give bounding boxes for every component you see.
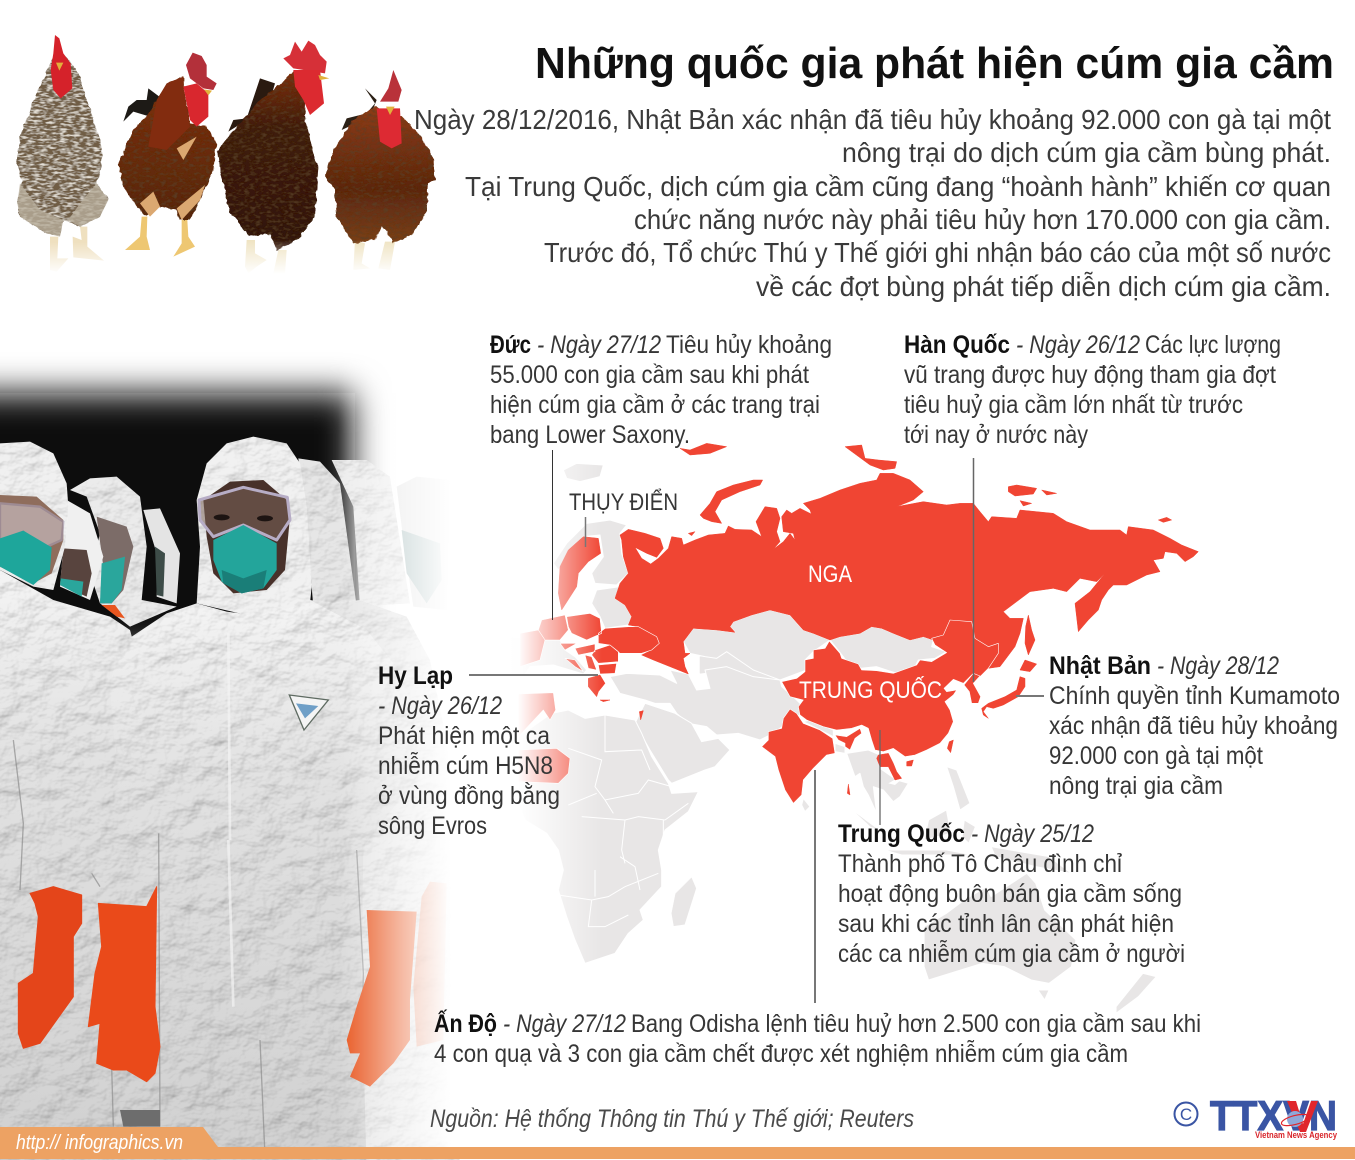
footer bar with url tab: http:// infographics.vn [16, 1132, 183, 1154]
logo: TTXVN: TTXVN [1210, 1092, 1337, 1139]
front left worker head [0, 442, 68, 590]
back figures [60, 458, 450, 627]
text block: Nhật Bản: Nhật Bản [1049, 652, 1151, 680]
text block: Hy Lạp: Hy Lạp [378, 662, 453, 690]
text block: Hàn Quốc: Hàn Quốc [904, 331, 1010, 359]
grey land: Europe, Asia [510, 463, 970, 813]
text block: Trung Quốc: các ca nhiễm cúm gia cầm ở người [838, 939, 1185, 968]
text block: Hàn Quốc: Các lực lượng [1145, 331, 1281, 359]
chicken 3: dark brown [218, 41, 329, 273]
text block: Trung Quốc: Trung Quốc [838, 820, 965, 848]
text block: Hàn Quốc: - Ngày 26/12 [1016, 331, 1140, 359]
chicken 2: red brown [118, 53, 217, 257]
text block: Nhật Bản [1049, 652, 1340, 800]
text block: Hy Lạp: ở vùng đồng bằng [378, 781, 560, 810]
suit bodies [0, 570, 460, 1160]
China [782, 620, 998, 757]
map label: Nga: NGA [808, 561, 852, 588]
text block: Trung Quốc: hoạt động buôn bán gia cầm sống [838, 880, 1182, 908]
world map [500, 440, 1198, 1013]
text block: Hàn Quốc [904, 331, 1281, 449]
text block: Đức: Đức [490, 331, 531, 359]
text block: Hy Lạp: nhiễm cúm H5N8 [378, 751, 553, 780]
text block: Ấn Độ: Ấn Độ [434, 1009, 497, 1038]
red: West Africa fade zone [518, 693, 570, 783]
Russia [615, 443, 1198, 785]
suit seams [13, 633, 363, 1157]
dark gap at bottom [120, 1110, 160, 1127]
illustration: four chickens [0, 35, 440, 274]
text block: Hy Lạp: sông Evros [378, 812, 487, 840]
intro text block [414, 104, 1331, 302]
text block: Nhật Bản: 92.000 con gà tại một [1049, 742, 1263, 770]
text block: Đức: bang Lower Saxony. [490, 421, 690, 449]
text block: Đức: Tiêu hủy khoảng [666, 331, 832, 359]
text block: Hy Lạp [378, 662, 560, 840]
map label: Trung Quốc: TRUNG QUỐC [799, 676, 942, 704]
icon: copyright mark: C [1180, 1105, 1192, 1124]
text block: Hàn Quốc: vũ trang được huy động tham gia đợt [904, 361, 1276, 389]
grey land: Africa, Oceania [518, 710, 698, 963]
map label: Thụy Điển: THỤY ĐIỂN [569, 488, 678, 516]
leader lines [469, 450, 1044, 1003]
text block: Hy Lạp: Phát hiện một ca [378, 722, 550, 750]
icon: copyright mark [1174, 1102, 1198, 1126]
text block: Đức: 55.000 con gia cầm sau khi phát [490, 361, 809, 389]
chicken 1: speckled [17, 35, 108, 272]
icon: globe [1280, 1101, 1318, 1132]
intro text block: nông trại do dịch cúm gia cầm bùng phát. [842, 137, 1331, 168]
orange gloves [18, 882, 447, 1087]
text block: Trung Quốc: sau khi các tỉnh lân cận phát hiện [838, 910, 1174, 938]
text block: Nhật Bản: nông trại gia cầm [1049, 772, 1223, 800]
logo: TTXVN: Vietnam News Agency [1255, 1130, 1337, 1140]
text block: Ấn Độ [434, 1009, 1201, 1068]
Southeast Asia red [847, 740, 953, 795]
text block: Hàn Quốc: tới nay ở nước này [904, 421, 1088, 449]
red countries [520, 443, 1198, 803]
Korea [964, 673, 981, 703]
photo: workers in protective suits [0, 340, 470, 1160]
text block: Đức [490, 331, 832, 449]
main worker hood [197, 437, 312, 617]
text block: Đức: hiện cúm gia cầm ở các trang trại [490, 391, 820, 419]
text block: Trung Quốc: Thành phố Tô Châu đình chỉ [838, 850, 1122, 878]
chicken 4: red brown [325, 70, 435, 270]
text block: Hy Lạp: - Ngày 26/12 [378, 692, 502, 720]
text block: Ấn Độ: - Ngày 27/12 [503, 1010, 626, 1038]
text block: Trung Quốc [838, 820, 1185, 968]
text block: Đức: - Ngày 27/12 [537, 331, 661, 359]
text block: Ấn Độ: 4 con quạ và 3 con gia cầm chết được xét nghiệm nhiễm cúm gia cầm [434, 1039, 1128, 1068]
source note: Nguồn: Hệ thống Thông tin Thú y Thế giới; Reuters [430, 1105, 914, 1133]
text block: Ấn Độ: Bang Odisha lệnh tiêu huỷ hơn 2.500 con gia cầm sau khi [631, 1010, 1201, 1038]
dark background [0, 393, 355, 653]
map west fade [500, 440, 602, 1000]
Europe red [520, 537, 659, 720]
footer bar with url tab [0, 1127, 1355, 1159]
text block: Hàn Quốc: tiêu huỷ gia cầm lớn nhất từ trước [904, 391, 1243, 419]
text block: Nhật Bản: - Ngày 28/12 [1157, 652, 1279, 680]
text block: Trung Quốc: - Ngày 25/12 [971, 820, 1094, 848]
title: Những quốc gia phát hiện cúm gia cầm [535, 39, 1334, 88]
suit badge [289, 695, 328, 730]
photo right fade [338, 340, 470, 1150]
intro text block: về các đợt bùng phát tiếp diễn dịch cúm gia cầm. [756, 271, 1331, 302]
Japan [982, 660, 1037, 718]
India [762, 709, 835, 803]
